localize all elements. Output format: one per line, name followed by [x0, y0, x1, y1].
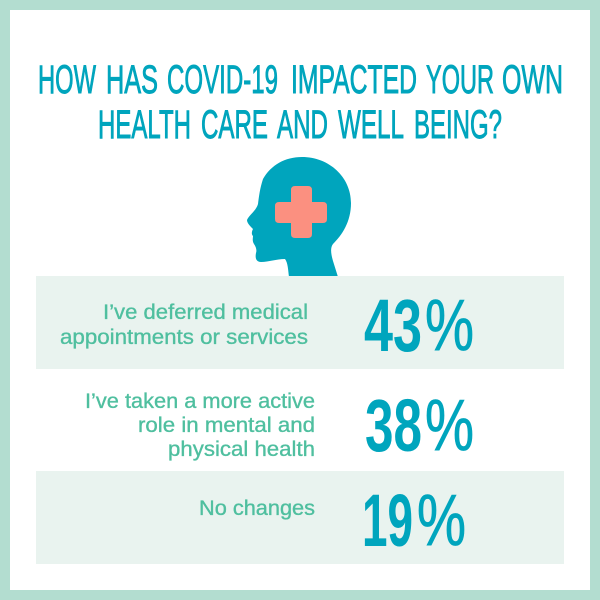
row: deferred appointments: I’ve deferred medical [103, 301, 308, 324]
row: more active role: % [425, 386, 474, 466]
row: deferred appointments [36, 276, 564, 369]
row: no changes: No changes [199, 497, 315, 520]
row: more active role: 38 [365, 384, 422, 467]
icon: cross [275, 186, 327, 238]
title: CARE [201, 103, 268, 147]
row: more active role [85, 384, 474, 467]
row: no changes: % [417, 481, 466, 561]
title: HAS [106, 58, 158, 102]
title: YOUR [426, 58, 494, 102]
title: COVID-19 [167, 58, 278, 102]
title: HOW [38, 58, 96, 102]
title: OWN [502, 58, 563, 102]
title [38, 58, 563, 147]
title: HEALTH [98, 103, 191, 147]
row: no changes [36, 471, 564, 564]
row: more active role: role in mental and [138, 414, 315, 437]
row: deferred appointments: 43 [364, 284, 422, 367]
row: more active role: physical health [168, 438, 315, 461]
icon: head with medical cross [247, 157, 351, 277]
row: no changes: 19 [362, 479, 413, 562]
row: deferred appointments: % [425, 286, 474, 366]
row: more active role: I’ve taken a more active [85, 390, 315, 413]
title: BEING? [414, 103, 502, 147]
title: AND [277, 103, 328, 147]
title: WELL [338, 103, 404, 147]
row: deferred appointments: appointments or services [60, 326, 308, 349]
title: IMPACTED [291, 58, 417, 102]
